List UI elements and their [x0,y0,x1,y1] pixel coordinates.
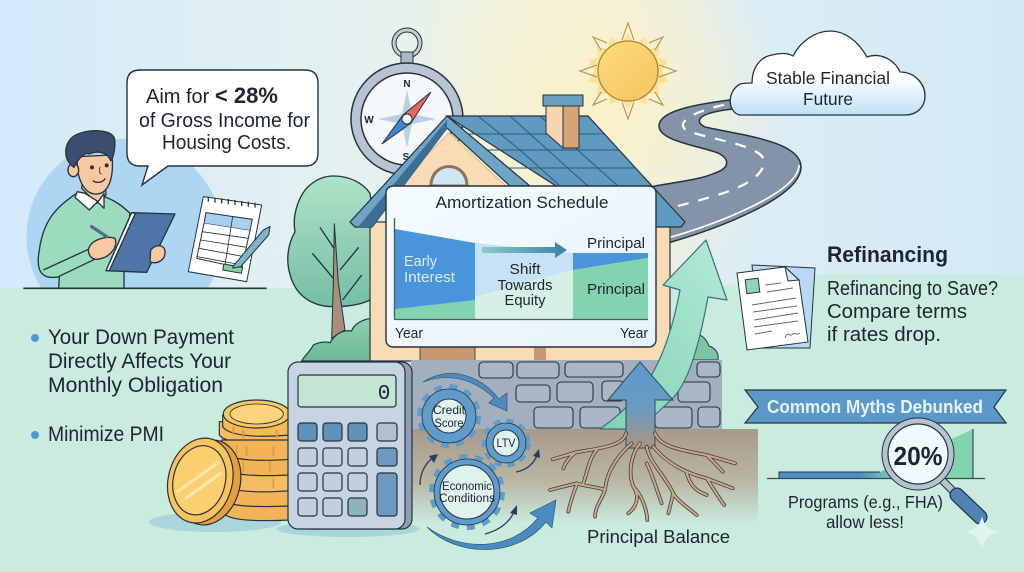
gear: credit score: Score [434,416,464,430]
chimney [543,95,583,148]
calculator [288,362,412,529]
cloud label: Stable Financial [766,68,890,88]
key points list: Directly Affects Your [48,350,231,373]
cloud label [766,68,890,109]
speech bubble: Housing Costs. [162,132,291,154]
cycle arrows [420,374,556,550]
roots: principal balance [550,433,735,520]
refinancing text block: Compare terms [827,300,967,323]
calculator keys [298,423,397,516]
house [350,95,685,361]
calculator shadow [276,521,420,537]
myth note [788,492,943,532]
sparkle [965,516,1000,549]
myth note: Programs (e.g., FHA) [788,492,943,512]
cloud: stable financial future [730,31,925,115]
tree [288,176,380,361]
myths banner [745,390,1006,423]
magnifying glass 20%: 20% [894,441,942,471]
shadow under coins [149,512,281,532]
person with tablet [23,131,267,288]
sun icon [580,23,676,119]
amortization chart: Principal [587,235,645,252]
refinancing document icon [737,265,815,350]
background mint ground [0,274,1024,572]
sun glow [400,0,800,300]
cloud label: Future [803,89,853,109]
amortization chart: Year [620,326,648,342]
roof [350,116,685,227]
compass icon: S [403,152,410,163]
amortization chart: Equity [504,292,546,309]
gear: LTV: LTV [496,438,516,450]
amortization schedule panel [386,186,656,347]
panel title: Amortization Schedule [436,194,608,212]
ground soil [412,429,758,524]
refinancing text block: Refinancing to Save? [827,277,998,300]
key points list: Monthly Obligation [48,374,223,397]
notepad table with pen [188,197,270,282]
myth note: allow less! [826,512,904,532]
calculator display: 0 [378,383,390,406]
compass icon [351,30,463,175]
attic window [431,166,467,186]
speech bubble: of Gross Income for [139,110,310,132]
winding road [650,100,801,243]
shift arrow [482,242,567,258]
refinancing text block [827,242,998,346]
gear: credit score [420,387,478,445]
blue up arrow [608,362,673,448]
amortization chart: Principal [587,281,645,298]
blue circle behind person [27,139,223,288]
compass icon: W [364,115,374,126]
gear: economic conditions [432,457,502,527]
door and wall base [420,347,546,361]
myth chart [767,429,985,478]
principal balance label: Principal Balance [587,526,730,547]
big green growth arrow [600,240,727,429]
large coin [159,431,250,532]
refinancing text block: if rates drop. [827,323,941,346]
gear: LTV [484,421,528,465]
gear: economic conditions: Conditions [439,493,495,505]
speech bubble: Aim for < 28% [146,83,278,108]
stone wall [411,360,722,432]
gear: credit score: Credit [433,403,466,417]
key points list [31,326,234,446]
refinancing text block: Refinancing [827,242,948,267]
key points list: Your Down Payment [48,326,234,349]
myths banner: Common Myths Debunked [767,397,983,417]
coin stack [219,400,290,521]
amortization chart: Shift [510,261,541,278]
amortization chart: Year [395,326,423,342]
amortization chart [394,218,648,342]
amortization chart: Towards [498,277,552,294]
key points list: Minimize PMI [48,423,164,446]
amortization chart: Early [404,253,437,270]
amortization chart: Interest [404,269,456,286]
calculator display [298,375,396,407]
right bush [692,335,718,360]
compass icon: N [403,79,411,90]
magnifying glass 20% [882,418,980,517]
speech bubble [127,70,318,185]
gear: economic conditions: Economic [442,481,492,493]
